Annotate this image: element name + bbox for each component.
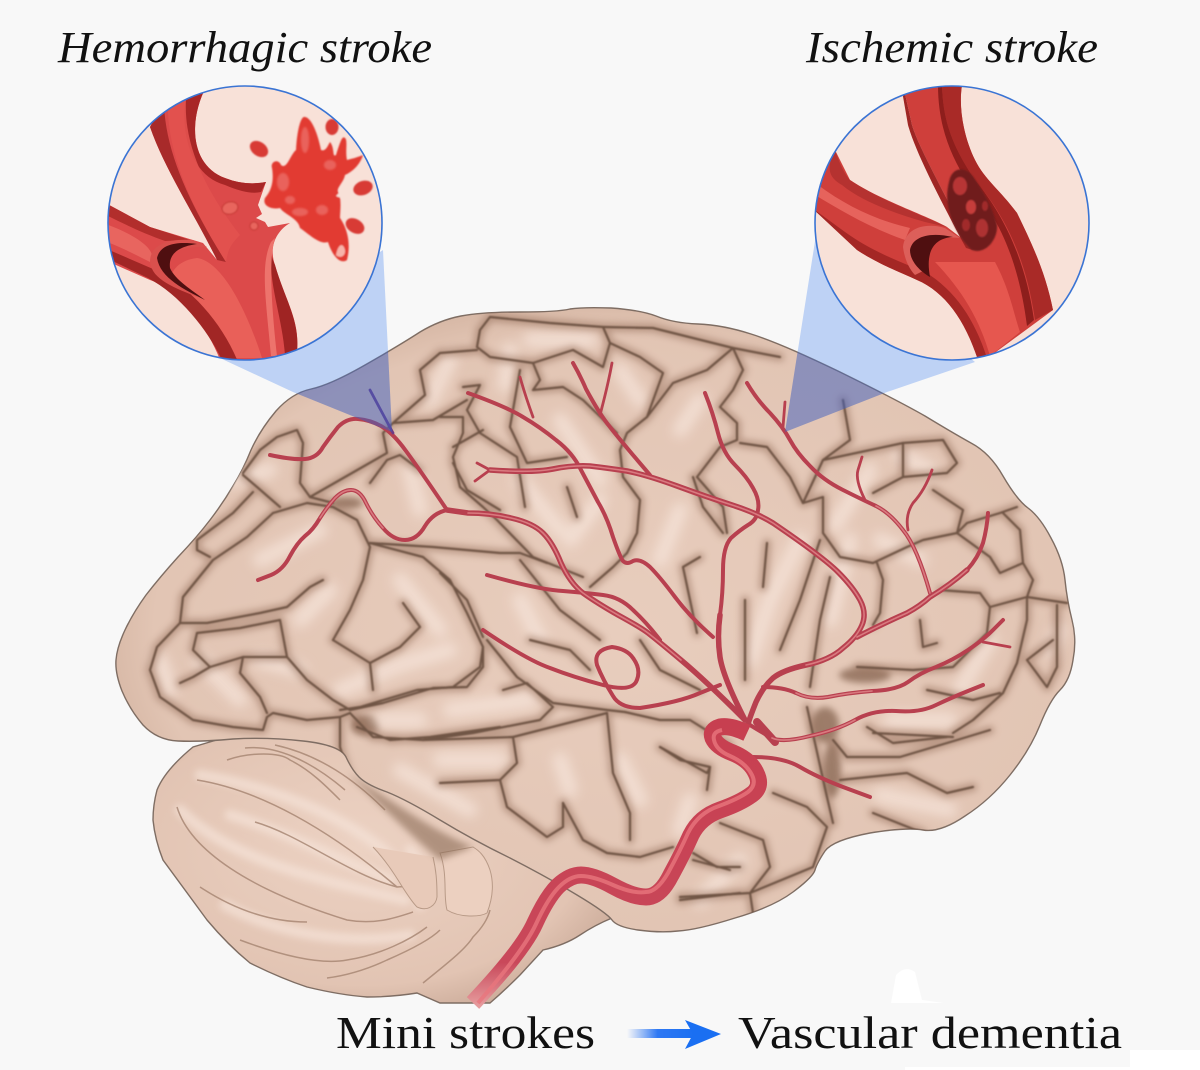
- caption: vascular dementia: Vascular dementia: [738, 1007, 1122, 1058]
- inset circle: hemorrhagic stroke: [100, 85, 382, 365]
- cerebellar lobule: [440, 847, 492, 916]
- ruptured vessel: [108, 93, 298, 360]
- inset circle: ischemic stroke: [810, 85, 1089, 360]
- main artery trunk: [473, 727, 759, 1003]
- brain illustration: [116, 308, 1075, 1003]
- clot: [947, 169, 997, 251]
- vessel lumen: [150, 240, 207, 298]
- callout cone: hemorrhagic stroke: [222, 250, 392, 432]
- heading: hemorrhagic stroke: Hemorrhagic stroke: [57, 23, 432, 72]
- callout cone: ischemic stroke: [785, 235, 975, 432]
- heading: ischemic stroke: Ischemic stroke: [805, 23, 1098, 72]
- vessel lumen: [903, 226, 960, 275]
- blood splatter: [221, 117, 375, 261]
- white background patches: [891, 969, 1200, 1070]
- arteries: cortical branches: [258, 363, 1010, 797]
- caption: mini strokes: Mini strokes: [336, 1007, 595, 1058]
- cerebrum: [116, 308, 1075, 932]
- cerebellum: [153, 720, 612, 1003]
- blocked vessel: [810, 85, 1053, 360]
- arrow: [627, 1020, 721, 1049]
